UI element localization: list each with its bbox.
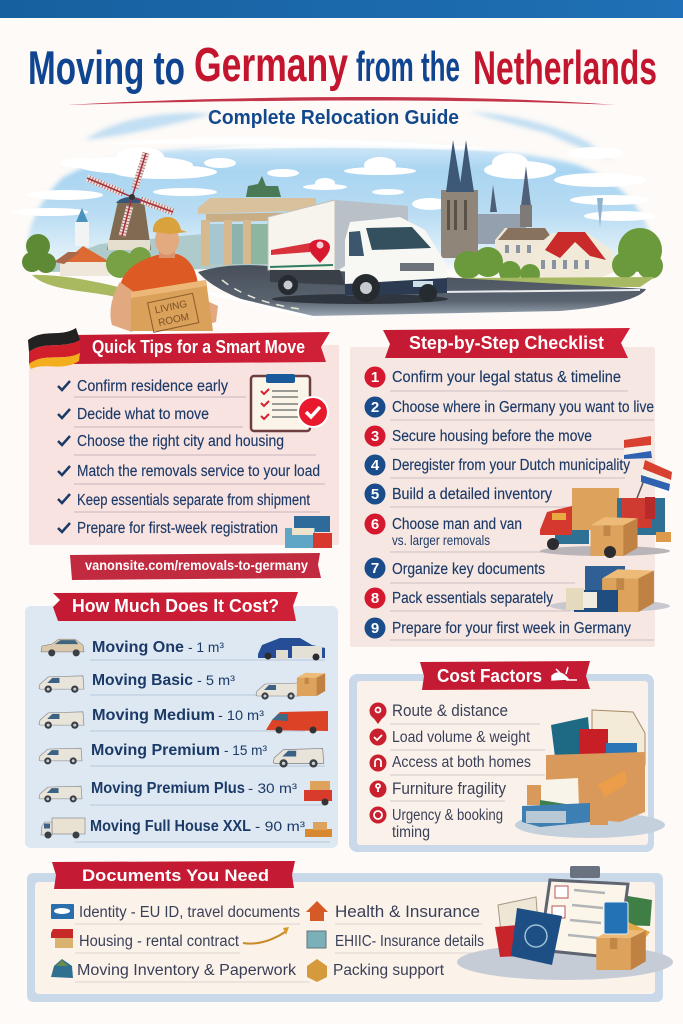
cost rows: Moving Medium xyxy=(92,707,215,724)
cost factors list: Route & distance xyxy=(392,702,508,720)
title: from the xyxy=(356,43,460,90)
numbered steps: Choose where in Germany you want to live xyxy=(392,399,654,416)
numbered steps: Secure housing before the move xyxy=(392,428,592,445)
heading banner: documents xyxy=(52,861,295,889)
numbered steps: 2 xyxy=(371,399,379,416)
cost rows: - 15 m³ xyxy=(224,742,267,758)
tips list: Choose the right city and housing xyxy=(77,433,284,450)
numbered steps: Prepare for your first week in Germany xyxy=(392,620,631,637)
url banner xyxy=(70,553,321,580)
numbered steps: 5 xyxy=(371,486,379,503)
clouds xyxy=(12,147,656,221)
heading banner: checklist xyxy=(383,328,630,358)
cost factors list: Furniture fragility xyxy=(392,780,507,798)
numbered steps: Choose man and van xyxy=(392,516,522,533)
top blue band xyxy=(0,0,683,18)
mover with box: LIVING xyxy=(154,299,188,316)
numbered steps: 3 xyxy=(371,428,379,445)
heading banner: checklist: Step-by-Step Checklist xyxy=(409,333,604,353)
title: Moving to xyxy=(28,41,185,94)
numbered steps: vs. larger removals xyxy=(392,532,490,548)
numbered steps: 6 xyxy=(371,516,379,533)
numbered steps: 8 xyxy=(371,590,379,607)
numbered steps: 9 xyxy=(371,620,379,637)
title xyxy=(28,39,657,94)
cost rows: - 30 m³ xyxy=(248,780,297,796)
spire tower left xyxy=(75,208,89,246)
houses xyxy=(495,198,614,278)
cost rows: - 10 m³ xyxy=(218,707,264,723)
heading banner: cost factors xyxy=(420,661,590,690)
documents list: EHIIC- Insurance details xyxy=(335,933,484,950)
cathedral xyxy=(441,140,532,258)
documents list: Packing support xyxy=(333,962,445,979)
cost rows: Moving Basic xyxy=(92,672,193,689)
panel: quick tips xyxy=(28,328,339,548)
heading banner: cost: How Much Does It Cost? xyxy=(72,596,279,616)
icon: German flag xyxy=(28,328,80,369)
documents list: Health & Insurance xyxy=(335,902,480,921)
distant hills xyxy=(50,232,270,272)
tips list: Confirm residence early xyxy=(77,378,228,395)
cost rows: Moving Premium xyxy=(91,742,220,759)
moving truck xyxy=(268,200,448,304)
road xyxy=(198,265,646,318)
panel: how much does it cost xyxy=(25,592,338,848)
numbered steps: Organize key documents xyxy=(392,561,545,578)
documents list: Moving Inventory & Paperwork xyxy=(77,962,296,979)
cost rows: - 5 m³ xyxy=(197,672,235,688)
illustration: van with boxes xyxy=(540,488,671,558)
cost factors list: Load volume & weight xyxy=(392,729,531,746)
mover with box xyxy=(110,217,218,332)
cost rows: Moving Full House XXL xyxy=(90,818,251,835)
icon: storage boxes xyxy=(285,516,332,548)
illustration: box of documents xyxy=(515,710,665,838)
illustration: relocation scene xyxy=(12,112,663,332)
heading banner: quick tips xyxy=(72,332,330,364)
tips list: Match the removals service to your load xyxy=(77,463,320,480)
cost rows: Moving Premium Plus xyxy=(91,780,245,797)
icons: right vehicles and loads xyxy=(256,638,332,837)
title: Germany xyxy=(194,39,348,92)
icon: Dutch flags xyxy=(624,436,672,498)
cost rows: - 90 m³ xyxy=(255,818,305,834)
heading banner: quick tips: Quick Tips for a Smart Move xyxy=(92,337,305,357)
cost rows xyxy=(75,639,330,842)
numbered steps: 4 xyxy=(371,457,380,474)
tips list: Keep essentials separate from shipment xyxy=(77,492,311,509)
numbered steps: 1 xyxy=(371,369,379,386)
title underline xyxy=(68,97,615,105)
documents list: Identity - EU ID, travel documents xyxy=(79,904,300,921)
numbered steps: 7 xyxy=(371,560,379,577)
tips list: Decide what to move xyxy=(77,406,209,423)
documents list xyxy=(51,901,484,982)
numbered steps xyxy=(364,366,654,640)
grass left xyxy=(32,275,130,298)
heading banner: cost factors: Cost Factors xyxy=(437,666,542,686)
Brandenburg gate xyxy=(198,176,316,266)
illustration: packed boxes xyxy=(550,566,670,612)
sky xyxy=(27,112,653,268)
documents list: Housing - rental contract xyxy=(79,933,240,950)
windmill xyxy=(87,153,173,250)
cost factors list xyxy=(370,702,545,841)
cost rows: - 1 m³ xyxy=(188,639,224,655)
icons: left vehicles xyxy=(39,639,85,838)
illustration: passport and clipboard xyxy=(457,866,673,980)
panel: checklist xyxy=(350,328,672,647)
subtitle: Complete Relocation Guide xyxy=(208,106,459,129)
cost factors list: Access at both homes xyxy=(392,754,531,771)
panel: documents you need xyxy=(27,861,673,1002)
heading banner: documents: Documents You Need xyxy=(82,866,269,885)
icon: clipboard xyxy=(251,374,328,431)
grass right xyxy=(447,277,655,287)
cost rows: Moving One xyxy=(92,639,184,656)
left tree xyxy=(22,234,151,278)
tips list xyxy=(58,378,325,537)
numbered steps: Build a detailed inventory xyxy=(392,486,552,503)
cost factors list: Urgency & booking xyxy=(392,807,503,824)
numbered steps: Pack essentials separately xyxy=(392,590,553,607)
cost factors list: timing xyxy=(392,824,430,841)
orange house xyxy=(54,246,110,276)
numbered steps: Confirm your legal status & timeline xyxy=(392,369,621,386)
mover with box: ROOM xyxy=(157,312,190,329)
panel: cost factors xyxy=(349,661,665,852)
heading banner: cost xyxy=(53,592,298,621)
url banner: vanonsite.com/removals-to-germany xyxy=(85,557,308,573)
trees xyxy=(454,228,663,284)
tips list: Prepare for first-week registration xyxy=(77,520,278,537)
numbered steps: Deregister from your Dutch municipality xyxy=(392,457,630,474)
